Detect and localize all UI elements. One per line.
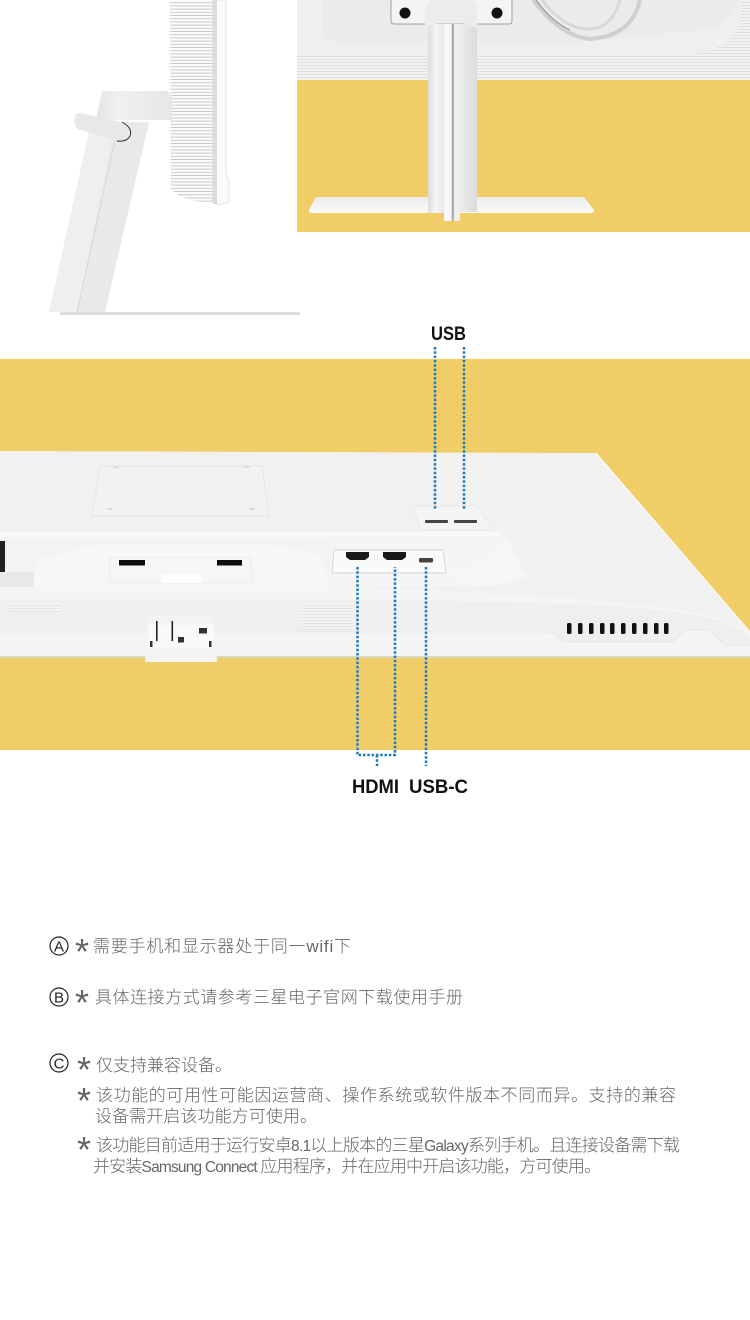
footnote B [50, 982, 463, 1023]
monitor side edge strip [213, 0, 229, 205]
rear ledge [0, 537, 527, 587]
USB-C label: USB-C [409, 777, 468, 798]
footnote C: C [54, 1056, 65, 1072]
monitor top panel [0, 451, 750, 657]
USB-C port [419, 558, 433, 562]
note on feature availability: * [77, 1080, 91, 1121]
footnote C: * [77, 1049, 91, 1090]
footnote A: A [54, 938, 64, 956]
USB port plate [413, 506, 493, 530]
note on supported phones: * [77, 1129, 91, 1170]
cut-off stand stub [0, 541, 5, 573]
HDMI port left [346, 552, 369, 560]
side view of monitor and stand [49, 0, 300, 315]
note on supported phones: 该功能目前适用于运行安卓8.1以上版本的三星Galaxy系列手机。且连接设备需下载 [96, 1136, 680, 1155]
USB port left [425, 520, 448, 523]
stand recess [33, 545, 330, 587]
monitor seen from below [0, 451, 750, 662]
lower lip [0, 630, 750, 657]
footnote A [50, 931, 351, 972]
VESA screw holes [107, 466, 255, 510]
lower lip outline [0, 630, 750, 645]
monitor ribbed back, side view [170, 0, 213, 203]
ledge highlight [0, 532, 500, 537]
bezel shaded band [0, 600, 750, 645]
screw left [400, 8, 410, 18]
USB port right [454, 520, 477, 523]
footnote A: * [75, 931, 89, 972]
note on supported phones: 并安装Samsung Connect 应用程序，并在应用中开启该功能，方可使用。 [93, 1157, 601, 1176]
stand slot left [119, 560, 145, 566]
stand mount opening [110, 557, 253, 583]
screw right [492, 8, 502, 18]
stand hinge knob [74, 113, 131, 141]
USB label: USB [431, 324, 466, 345]
footnote C [50, 1049, 232, 1090]
stand slot right [217, 560, 242, 566]
vent right [302, 603, 352, 630]
right edge highlight [596, 453, 750, 632]
note on feature availability [77, 1080, 676, 1126]
column collar [425, 0, 477, 28]
HDMI port right [383, 552, 406, 560]
footnote A: 需要手机和显示器处于同一wifi下 [93, 937, 351, 956]
VESA plate outline [92, 466, 269, 516]
lower shelf [297, 0, 742, 56]
side recess shade [0, 572, 34, 587]
port panel [332, 550, 446, 573]
stand pole, side view [49, 122, 149, 312]
footnote B: B [54, 990, 64, 1006]
vent left [10, 603, 60, 613]
center control tab [145, 616, 217, 662]
stand column [428, 24, 477, 221]
footnote C: 仅支持兼容设备。 [96, 1056, 232, 1075]
HDMI label: HDMI [352, 777, 399, 798]
footnote B: * [75, 982, 89, 1023]
cable loop [533, 0, 640, 39]
stand latch [161, 574, 201, 583]
recess curved shade [446, 538, 527, 587]
yellow background, rear view [297, 80, 750, 232]
VESA mount plate [391, 0, 512, 24]
recessed back area [322, 0, 738, 42]
vent grille of ten slots [567, 623, 668, 634]
note on supported phones [77, 1129, 680, 1176]
rear recess for ports [330, 538, 527, 587]
ribbed bottom band [297, 0, 750, 80]
monitor back lower section [297, 0, 750, 80]
stand neck block [96, 91, 172, 120]
bottom shadow edge [0, 656, 750, 658]
yellow background band [0, 359, 750, 750]
lower front bezel [0, 587, 750, 657]
USB dotted leader lines [435, 347, 464, 509]
stand base plate [309, 197, 594, 213]
note on feature availability: 设备需开启该功能方可使用。 [95, 1107, 317, 1126]
rear view of monitor and stand [297, 0, 750, 221]
HDMI dotted bracket [358, 567, 395, 766]
USB-C dotted leader line [425, 567, 427, 766]
footnote B: 具体连接方式请参考三星电子官网下载使用手册 [95, 988, 463, 1007]
note on feature availability: 该功能的可用性可能因运营商、操作系统或软件版本不同而异。支持的兼容 [96, 1086, 676, 1105]
stand base, side view [60, 312, 300, 315]
